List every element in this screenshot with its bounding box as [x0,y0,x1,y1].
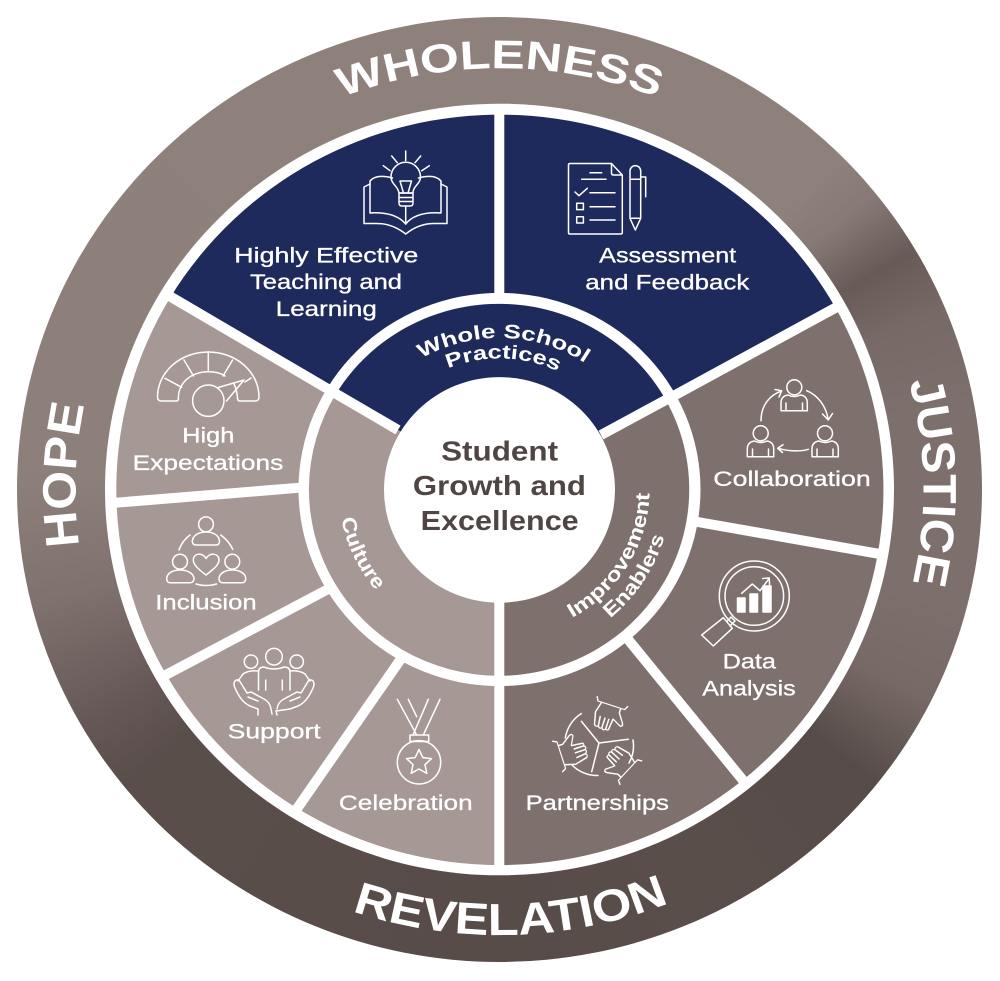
panel: whole school practices band [336,304,666,490]
label: High Expectations: High [182,424,234,448]
heading: Hope: HOPE [42,402,84,546]
icon: speedometer gauge [158,352,259,416]
panel: improvement enablers outer sector [500,308,883,865]
label: Culture: Culture [342,518,382,588]
icon: medal [397,699,441,784]
label: Partnerships: Partnerships [526,791,669,815]
white gap between ring and segments [105,104,894,875]
label: Data Analysis: Data [723,649,776,673]
icon: three joined hands [552,697,642,785]
label: Whole School Practices: Practices [445,344,560,370]
heading: Revelation: REVELATION [355,875,666,936]
label: Whole School Practices: Whole School [415,324,591,362]
panel: improvement enablers band [500,400,689,676]
panel: whole school practices outer sector [171,115,835,490]
label: Improvement Enablers: Improvement [566,493,650,617]
label: Celebration: Celebration [339,791,473,815]
panel: culture outer sector [116,297,500,865]
icon: lightbulb and book [364,151,447,234]
label: Highly Effective Teaching and Learning: Teaching and [250,270,402,294]
icon: people around a heart [167,517,246,586]
label: Highly Effective Teaching and Learning: Learning [276,297,377,321]
label: Improvement Enablers: Enablers [602,535,664,618]
centre title: Student [441,436,558,467]
label: Data Analysis: Analysis [702,677,796,701]
label: Highly Effective Teaching and Learning: Highly Effective [234,243,418,267]
heading: Justice: JUSTICE [911,380,956,586]
centre circle [384,377,615,603]
label: Support: Support [228,719,321,743]
panel: culture band [309,394,500,676]
label: High Expectations [133,424,283,475]
heading: Wholeness: WHOLENESS [332,40,662,94]
icon: people in supporting hands [234,648,314,715]
icon: collaboration cycle [747,380,838,457]
white gap around middle ring [298,293,700,686]
label: High Expectations: Expectations [133,451,283,475]
label: Data Analysis [702,649,796,701]
centre title: Growth and [413,470,586,501]
label: Highly Effective Teaching and Learning [234,243,418,321]
centre title: Excellence [421,505,579,536]
label: Inclusion: Inclusion [155,590,257,614]
icon: magnifier with chart [702,561,789,646]
label: Collaboration: Collaboration [713,467,871,491]
centre title [413,436,586,536]
label: Assessment and Feedback: Assessment [599,243,736,267]
icon: checklist and pen [568,164,646,234]
label: Assessment and Feedback: and Feedback [585,270,750,294]
label: Assessment and Feedback [585,243,750,294]
